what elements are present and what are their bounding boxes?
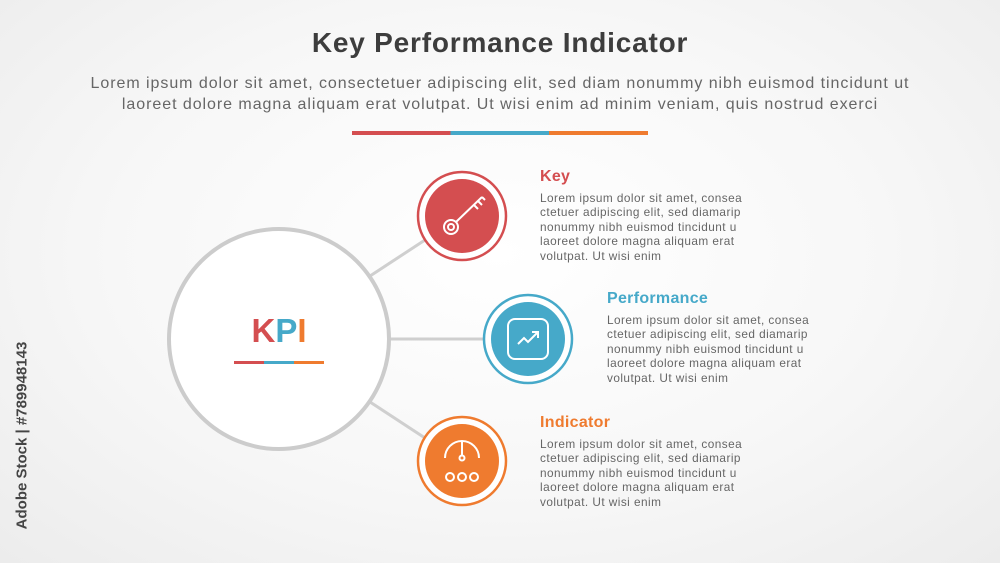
central KPI circle: KPI — [251, 312, 307, 349]
text block: Key: nonummy nibh euismod tincidunt u — [540, 220, 737, 234]
text block: Indicator: nonummy nibh euismod tincidunt u — [540, 466, 737, 480]
text block: Performance: laoreet dolore magna aliquam erat — [607, 356, 802, 370]
subtitle text — [91, 75, 909, 113]
watermark side text: Adobe Stock | #789948143 — [14, 342, 30, 529]
text block: Performance: Performance — [607, 290, 708, 307]
text block: Indicator — [540, 414, 742, 509]
icon: chart — [484, 295, 572, 383]
text block: Indicator: Lorem ipsum dolor sit amet, consea — [540, 437, 742, 451]
title: Key Performance Indicator — [312, 27, 688, 58]
connectors — [370, 240, 485, 438]
text block: Performance: Lorem ipsum dolor sit amet, consea — [607, 313, 809, 327]
text block: Performance: volutpat. Ut wisi enim — [607, 371, 728, 385]
text block: Key: volutpat. Ut wisi enim — [540, 249, 661, 263]
text block: Key: Key — [540, 168, 570, 185]
text block: Indicator: Indicator — [540, 414, 610, 431]
text block: Key — [540, 168, 742, 263]
text block: Performance: ctetuer adipiscing elit, sed diamarip — [607, 327, 808, 341]
central KPI circle — [169, 229, 389, 449]
icon: gauge — [418, 417, 506, 505]
text block: Indicator: laoreet dolore magna aliquam erat — [540, 480, 735, 494]
subtitle text: Lorem ipsum dolor sit amet, consectetuer adipiscing elit, sed diam nonummy nibh euismod tincidunt ut — [91, 75, 909, 92]
subtitle text: laoreet dolore magna aliquam erat volutpat. Ut wisi enim ad minim veniam, quis nostrud exerci — [122, 96, 878, 113]
icon: key — [418, 172, 506, 260]
text block: Performance: nonummy nibh euismod tincidunt u — [607, 342, 804, 356]
tricolor divider — [352, 131, 648, 135]
text block: Performance — [607, 290, 809, 385]
text block: Indicator: ctetuer adipiscing elit, sed diamarip — [540, 451, 741, 465]
text block: Key: ctetuer adipiscing elit, sed diamarip — [540, 205, 741, 219]
text block: Key: Lorem ipsum dolor sit amet, consea — [540, 191, 742, 205]
text block: Key: laoreet dolore magna aliquam erat — [540, 234, 735, 248]
text block: Indicator: volutpat. Ut wisi enim — [540, 495, 661, 509]
